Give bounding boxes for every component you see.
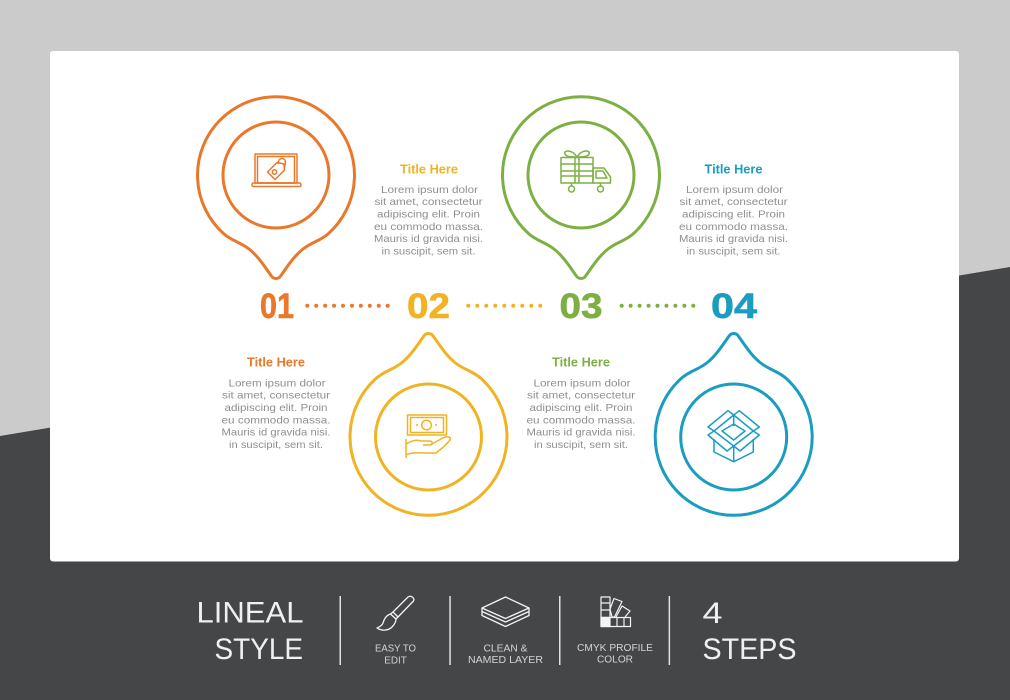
dotted connector 3 (622, 304, 694, 308)
text block: step 4 description (526, 356, 636, 451)
text block: step 1 description: Mauris id gravida nisi. (374, 233, 483, 245)
icon: open box (708, 411, 759, 462)
heading: 4 steps: STEPS (702, 633, 796, 666)
text block: step 4 description: Mauris id gravida nisi. (526, 426, 636, 438)
text block: step 4 description: eu commodo massa. (526, 414, 636, 426)
text block: step 4 description: Title Here (552, 356, 610, 370)
pin 1 (198, 97, 354, 278)
text block: step 3 description: in suscipit, sem sit. (686, 245, 780, 257)
step number 03: 03 (560, 287, 602, 326)
heading: lineal style: LINEAL (196, 596, 304, 630)
text block: step 3 description (679, 162, 788, 257)
text block: step 1 description (374, 162, 483, 257)
text block: step 1 description: eu commodo massa. (374, 221, 483, 233)
text block: step 3 description: eu commodo massa. (679, 221, 788, 233)
text block: step 4 description: Lorem ipsum dolor (534, 378, 631, 390)
text block: step 2 description: eu commodo massa. (222, 414, 330, 426)
heading: lineal style (196, 596, 304, 666)
text block: step 1 description: in suscipit, sem sit. (382, 245, 476, 257)
text block: step 4 description: sit amet, consectetur (527, 390, 636, 402)
text block: step 3 description: Title Here (704, 162, 763, 176)
text block: step 3 description: Lorem ipsum dolor (686, 184, 784, 196)
heading: 4 steps: 4 (702, 597, 722, 630)
text block: step 4 description: adipiscing elit. Proin (530, 402, 633, 414)
feature: easy to edit: EDIT (384, 654, 407, 666)
text block: step 2 description (222, 356, 331, 451)
panel: main white card (50, 51, 959, 562)
text block: step 3 description: Mauris id gravida nisi. (679, 233, 788, 245)
feature: cmyk profile color: COLOR (597, 654, 633, 666)
text block: step 2 description: sit amet, consectetur (222, 390, 331, 402)
step number 04: 04 (711, 287, 758, 326)
text block: step 1 description: Title Here (400, 162, 458, 176)
heading: lineal style: STYLE (214, 633, 303, 666)
icon: paint brush (377, 596, 414, 630)
step number 02: 02 (407, 287, 450, 326)
feature: clean and named layer: CLEAN & (484, 642, 528, 654)
heading: 4 steps (702, 597, 796, 666)
feature: cmyk profile color (577, 597, 653, 666)
text block: step 2 description: Title Here (247, 356, 305, 370)
text block: step 3 description: sit amet, consectetur (680, 196, 788, 208)
step number 01: 01 (260, 287, 294, 326)
icon: delivery truck with gift (561, 151, 610, 192)
feature: cmyk profile color: CMYK PROFILE (577, 642, 653, 654)
icon: stacked layers (482, 597, 529, 626)
dotted connector 2 (468, 304, 541, 308)
pin 3 (502, 97, 660, 278)
pin 2 (350, 334, 507, 515)
dotted connector 1 (307, 304, 388, 308)
icon: colour swatch fan (601, 597, 630, 626)
icon: laptop with price tag (252, 154, 301, 186)
text block: step 2 description: adipiscing elit. Proin (224, 402, 328, 414)
text block: step 2 description: Mauris id gravida nisi. (222, 426, 330, 438)
pin 4 (655, 334, 812, 515)
feature: easy to edit (375, 596, 416, 666)
text block: step 3 description: adipiscing elit. Proin (682, 208, 785, 220)
feature: easy to edit: EASY TO (375, 642, 416, 654)
feature: clean and named layer (468, 597, 543, 666)
feature: clean and named layer: NAMED LAYER (468, 654, 543, 666)
icon: hand holding money (406, 415, 450, 458)
text block: step 1 description: Lorem ipsum dolor (381, 184, 479, 196)
text block: step 2 description: Lorem ipsum dolor (228, 378, 326, 390)
text block: step 1 description: adipiscing elit. Proin (377, 208, 480, 220)
text block: step 1 description: sit amet, consectetur (374, 196, 483, 208)
text block: step 4 description: in suscipit, sem sit. (534, 439, 628, 451)
text block: step 2 description: in suscipit, sem sit. (229, 439, 323, 451)
